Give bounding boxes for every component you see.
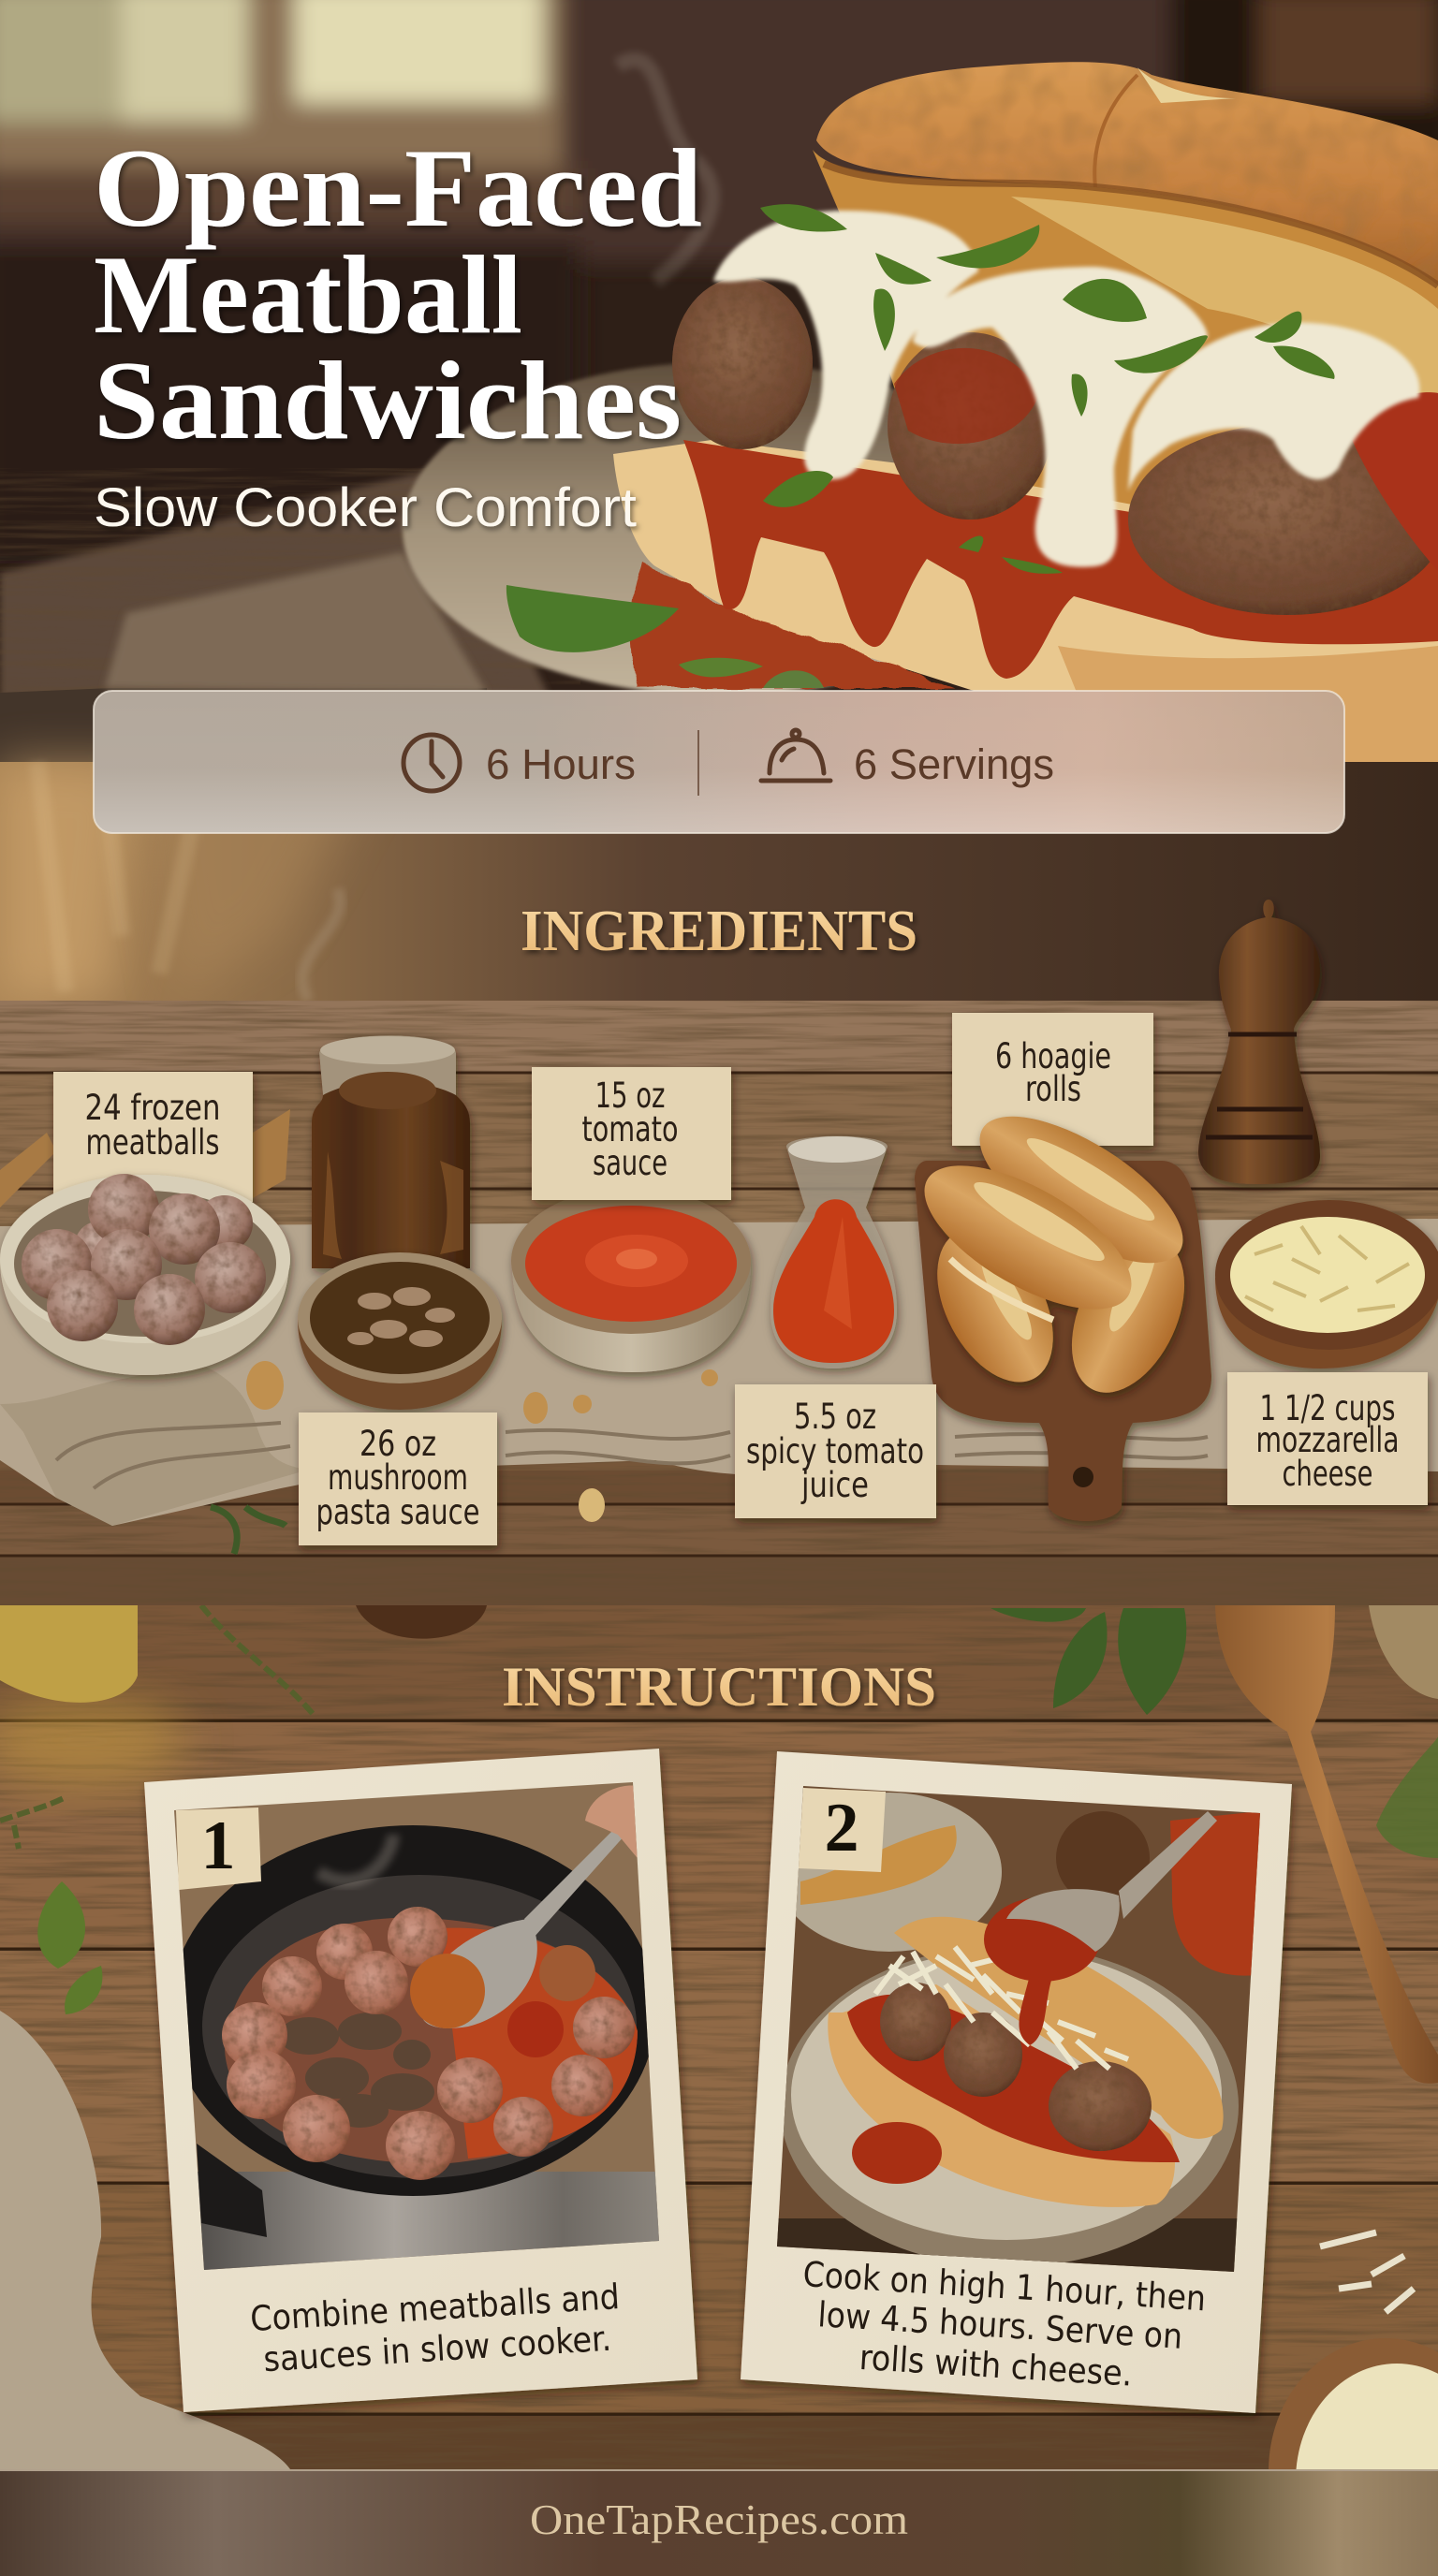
note: 1 1/2 cups mozzarella cheese: 1 1/2 cups (1260, 1388, 1395, 1428)
oil jar (0, 1605, 138, 1703)
note: 6 hoagie rolls: rolls (1025, 1069, 1081, 1109)
crumbs (246, 1361, 718, 1522)
thyme sprigs (0, 1605, 314, 1849)
linen runner (0, 1219, 1438, 1526)
note: 1 1/2 cups mozzarella cheese: mozzarella (1256, 1420, 1399, 1460)
sauce puddle on plate (630, 562, 954, 688)
subtitle: Slow Cooker Comfort (94, 477, 637, 538)
pepper mill (1198, 900, 1320, 1184)
top bun interior behind filling (813, 150, 1438, 505)
heading: instructions: INSTRUCTIONS (502, 1656, 936, 1718)
note: 15 oz tomato sauce: tomato (582, 1109, 678, 1149)
polaroid step 2 (741, 1751, 1292, 2413)
caption step 2: rolls with cheese. (858, 2337, 1134, 2394)
note: 5.5 oz spicy tomato juice: spicy tomato (746, 1431, 924, 1471)
herb sprig right (1376, 1736, 1438, 1858)
note: 15 oz tomato sauce (532, 1067, 731, 1200)
footer band (0, 2469, 1438, 2576)
caption step 2: low 4.5 hours. Serve on (816, 2294, 1183, 2357)
ingredients header band (0, 762, 1438, 1001)
title (94, 125, 702, 462)
mozzarella bowl (1215, 1200, 1438, 1368)
note: 6 hoagie rolls: 6 hoagie (995, 1036, 1111, 1076)
caption step 2 (797, 2254, 1207, 2398)
note: 6 hoagie rolls (952, 1013, 1153, 1146)
meatball bowl (0, 1174, 290, 1375)
note: 15 oz tomato sauce: sauce (593, 1143, 668, 1183)
note: 26 oz mushroom pasta sauce: 26 oz (360, 1424, 436, 1464)
sauce over bun (683, 440, 1438, 679)
tomato sauce bowl (511, 1188, 751, 1372)
mushroom sauce bowl (298, 1252, 502, 1410)
caption step 1: sauces in slow cooker. (262, 2319, 612, 2379)
ingredients table scene (0, 1001, 1438, 1605)
mushroom sauce jar (312, 1035, 470, 1268)
badge 2: 2 (824, 1790, 859, 1866)
title: Sandwiches (94, 338, 682, 462)
heading: ingredients: INGREDIENTS (521, 900, 917, 963)
note: 1 1/2 cups mozzarella cheese: cheese (1283, 1454, 1372, 1494)
note: 5.5 oz spicy tomato juice (735, 1384, 936, 1518)
title: Open-Faced (94, 125, 702, 250)
note: 1 1/2 cups mozzarella cheese (1227, 1372, 1428, 1505)
servings: 6 Servings (854, 740, 1054, 788)
spicy tomato juice bottle (770, 1136, 897, 1368)
note: 24 frozen meatballs: meatballs (86, 1122, 219, 1163)
caption step 1 (249, 2276, 624, 2380)
note: 15 oz tomato sauce: 15 oz (595, 1076, 665, 1116)
info bar (94, 691, 1344, 833)
hero photo: meatball sandwich on rustic table (0, 0, 1438, 762)
time: 6 Hours (486, 740, 636, 788)
polaroid step 1 (144, 1749, 697, 2412)
caption step 2: Cook on high 1 hour, then (801, 2254, 1207, 2319)
note: 24 frozen meatballs (53, 1072, 253, 1202)
bottom bun (613, 440, 1438, 691)
linen cloth (0, 2011, 290, 2469)
cutting board (915, 1161, 1211, 1521)
cheese bowl corner (1269, 2338, 1438, 2576)
hoagie rolls (903, 1089, 1207, 1411)
note: 24 frozen meatballs: 24 frozen (84, 1088, 221, 1128)
basil sprig (990, 1608, 1186, 1715)
icon: clock (404, 735, 460, 791)
badge 1: 1 (200, 1808, 236, 1884)
note: 5.5 oz spicy tomato juice: juice (800, 1465, 869, 1505)
melted cheese (713, 211, 1419, 567)
badge 1 (176, 1808, 261, 1890)
note: 5.5 oz spicy tomato juice: 5.5 oz (794, 1397, 876, 1437)
footer text: OneTapRecipes.com (530, 2496, 908, 2543)
note: 26 oz mushroom pasta sauce: pasta sauce (316, 1492, 479, 1532)
basil leaves left (37, 1881, 102, 2014)
herb sprig (211, 1507, 286, 1554)
note: 26 oz mushroom pasta sauce: mushroom (328, 1457, 468, 1498)
note: 26 oz mushroom pasta sauce (299, 1412, 497, 1545)
instructions wood table with props (0, 1605, 1438, 2576)
caption step 1: Combine meatballs and (249, 2276, 621, 2339)
title: Meatball (94, 232, 522, 357)
icon: serving cloche (761, 730, 830, 781)
wooden spoon (1215, 1605, 1438, 2084)
badge 2 (799, 1788, 886, 1872)
